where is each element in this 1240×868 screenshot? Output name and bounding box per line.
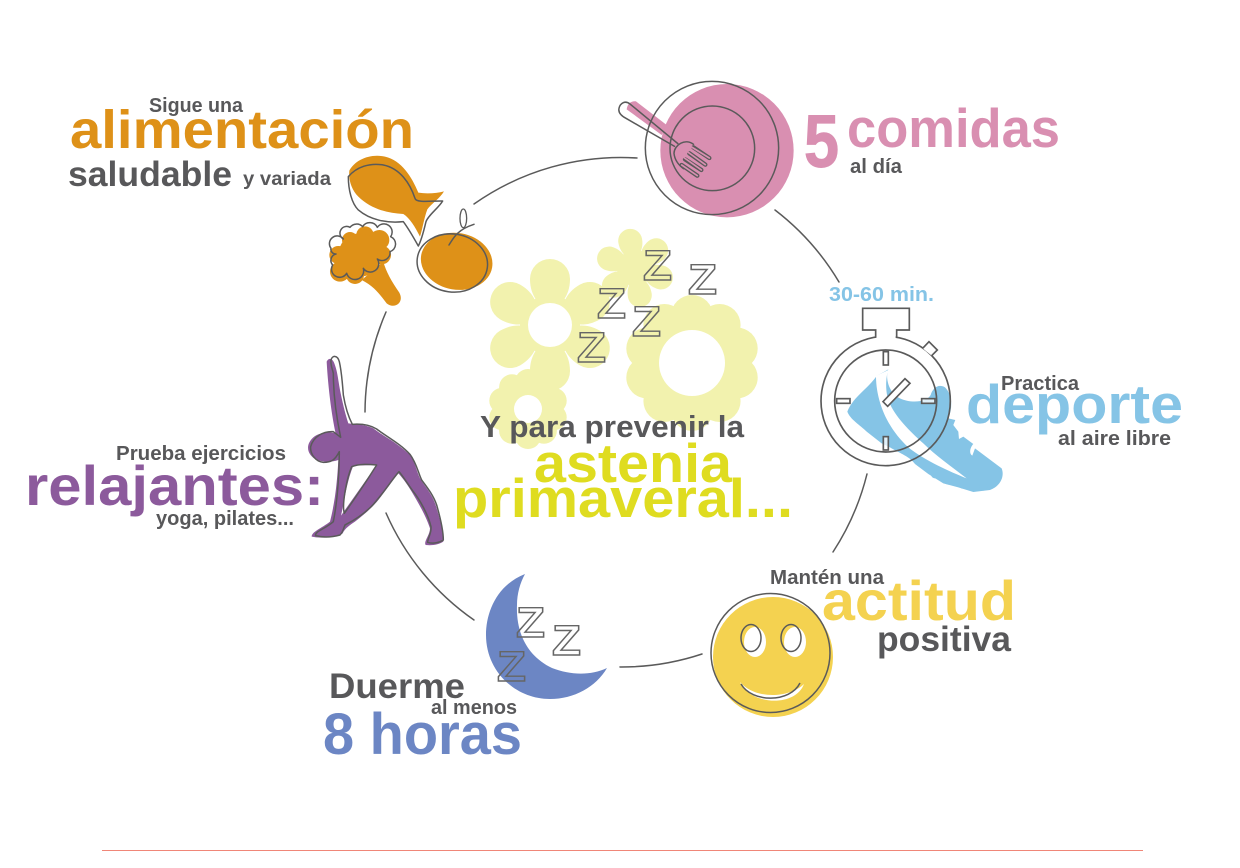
heading: alimentación: alimentación — [70, 100, 414, 160]
flower: small top — [588, 222, 682, 314]
panel: 8 horas — [323, 574, 607, 767]
icon: stopwatch — [821, 308, 950, 466]
flower: large left — [483, 259, 617, 391]
heading: deporte: Practica — [1001, 373, 1080, 395]
heading: alimentación — [68, 95, 414, 194]
icon: broccoli — [329, 223, 401, 306]
heading: 8 horas — [323, 667, 522, 767]
icon: smiley face — [711, 594, 833, 717]
panel: 5 comidas — [619, 81, 1060, 217]
icon: crescent moon — [486, 574, 607, 699]
icon: moon Z letters — [497, 599, 581, 691]
central title: Y para prevenir la — [480, 409, 745, 444]
heading: actitud positiva: positiva — [877, 620, 1012, 659]
icon: plate and fork — [619, 81, 794, 217]
label: 30-60 min.: 30-60 min. — [829, 284, 934, 306]
heading: relajantes: relajantes: — [25, 454, 324, 517]
heading: 8 horas: 8 horas — [323, 702, 522, 767]
sleeping Z letters over flowers: Z — [597, 280, 626, 328]
central title: primaveral... — [453, 467, 793, 529]
heading: 5 comidas: comidas — [847, 97, 1060, 159]
central title: astenia — [534, 432, 732, 494]
central title — [453, 409, 793, 529]
heading: actitud positiva: actitud — [822, 569, 1016, 632]
icon: running shoe — [847, 369, 1003, 492]
icon: moon Z letters: Z — [552, 617, 581, 665]
heading: alimentación: y variada — [243, 169, 331, 190]
panel: relajantes — [25, 356, 443, 545]
heading: alimentación: Sigue una — [149, 95, 244, 117]
icon: moon Z letters: Z — [497, 643, 526, 691]
flower: small bottom — [489, 369, 567, 449]
heading: actitud positiva: Mantén una — [770, 567, 885, 589]
heading: 5 comidas — [804, 97, 1060, 183]
icon: apple — [413, 209, 497, 297]
heading: 8 horas: al menos — [431, 697, 517, 719]
panel: actitud positiva — [711, 567, 1016, 717]
heading: actitud positiva — [770, 567, 1016, 659]
heading: 8 horas: Duerme — [329, 667, 465, 706]
heading: deporte: al aire libre — [1058, 428, 1171, 450]
heading: 5 comidas: al día — [850, 156, 903, 178]
panel: deporte — [821, 284, 1183, 492]
sleeping Z letters over flowers — [577, 242, 717, 372]
sleeping Z letters over flowers: Z — [688, 256, 717, 304]
footer rule — [102, 850, 1143, 851]
heading: alimentación: saludable — [68, 155, 232, 194]
sleeping Z letters over flowers: Z — [577, 324, 606, 372]
heading: 5 comidas: 5 — [804, 100, 839, 183]
heading: relajantes: yoga, pilates... — [156, 508, 294, 530]
sleeping Z letters over flowers: Z — [643, 242, 672, 290]
icon: moon Z letters: Z — [516, 599, 545, 647]
central flowers — [483, 222, 758, 449]
heading: relajantes: Prueba ejercicios — [116, 443, 286, 465]
icon: yoga figure — [308, 356, 443, 545]
circular connecting arcs — [365, 157, 867, 667]
panel: alimentación — [68, 95, 497, 306]
icon: fish — [348, 156, 444, 246]
heading: relajantes — [25, 443, 324, 530]
sleeping Z letters over flowers: Z — [632, 298, 661, 346]
heading: deporte: deporte — [966, 373, 1183, 435]
flower: large right — [626, 295, 758, 431]
